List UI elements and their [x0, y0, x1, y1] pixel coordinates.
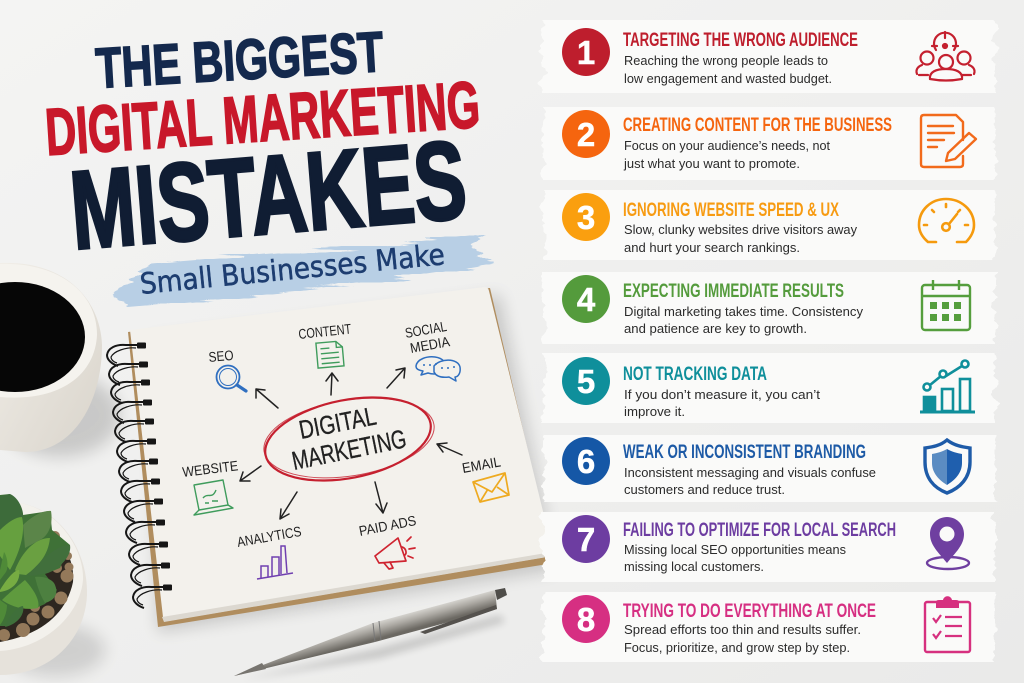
icon: growth chart	[920, 360, 975, 412]
row 1	[543, 20, 995, 93]
description	[623, 138, 830, 171]
node: Social Media	[404, 318, 460, 381]
notebook shadow	[150, 295, 556, 632]
heading: IGNORING WEBSITE SPEED & UX	[623, 200, 839, 221]
description: Missing local SEO opportunities means	[624, 542, 846, 557]
row 8	[543, 592, 995, 662]
description: improve it.	[624, 404, 685, 419]
Email label: EMAIL	[461, 453, 502, 476]
mistakes list	[543, 20, 995, 662]
band	[543, 512, 995, 582]
node: SEO	[208, 347, 246, 391]
subtitle text: Small Businesses Make	[138, 237, 446, 301]
number badge	[562, 275, 610, 323]
cup rim	[0, 264, 97, 398]
band	[543, 353, 995, 423]
pen clip	[420, 605, 497, 634]
pen band	[373, 621, 381, 642]
cup body	[0, 263, 102, 452]
Website label: WEBSITE	[181, 457, 239, 480]
number badge	[562, 28, 610, 76]
description	[624, 542, 846, 574]
band	[543, 107, 995, 180]
number badge	[562, 515, 610, 563]
number badge: 3	[577, 199, 595, 236]
description: Spread efforts too thin and results suffer.	[624, 622, 861, 637]
band	[543, 190, 995, 260]
succulent leaves	[0, 494, 70, 627]
description: Inconsistent messaging and visuals confuse	[624, 465, 876, 480]
icon: envelope	[473, 473, 509, 502]
icon: checklist clipboard	[925, 596, 970, 652]
icon: map pin	[927, 517, 969, 569]
description: and hurt your search rankings.	[624, 240, 800, 255]
spiral binding	[107, 342, 172, 608]
node: Paid Ads	[358, 512, 418, 569]
page edge	[162, 552, 553, 622]
description	[624, 53, 832, 86]
description	[624, 622, 861, 655]
pen button	[495, 588, 507, 600]
description: missing local customers.	[624, 559, 764, 574]
icon: shield	[925, 440, 970, 493]
heading: TRYING TO DO EVERYTHING AT ONCE	[623, 601, 876, 622]
icon: laptop	[194, 480, 233, 515]
number badge: 5	[577, 363, 595, 400]
pen tip	[234, 663, 266, 676]
oval	[258, 385, 440, 493]
row 4	[543, 272, 995, 344]
description: If you don’t measure it, you can’t	[624, 387, 820, 402]
band	[543, 592, 995, 662]
plant	[0, 494, 105, 676]
title line: The Biggest: THE BIGGEST	[94, 20, 385, 101]
number badge: 2	[577, 116, 595, 153]
node: Content	[298, 320, 352, 368]
Paid Ads label: PAID ADS	[358, 512, 418, 539]
description: Digital marketing takes time. Consistency	[624, 304, 864, 319]
icon: chat bubbles	[416, 357, 460, 381]
description: Focus, prioritize, and grow step by step.	[624, 640, 850, 655]
number badge	[562, 357, 610, 405]
description: and patience are key to growth.	[624, 321, 807, 336]
description: just what you want to promote.	[623, 156, 800, 171]
heading: WEAK OR INCONSISTENT BRANDING	[623, 442, 866, 463]
icon: magnifier	[216, 366, 246, 391]
icon: document and pencil	[921, 115, 976, 167]
number badge	[562, 193, 610, 241]
title line: Mistakes: MISTAKES	[66, 118, 471, 273]
number badge	[562, 595, 610, 643]
title	[43, 20, 482, 273]
row 5	[543, 353, 995, 423]
pot rim	[0, 503, 83, 651]
number badge: 7	[577, 521, 595, 558]
icon: target audience	[916, 32, 975, 80]
heading: TARGETING THE WRONG AUDIENCE	[623, 30, 858, 51]
description	[624, 304, 864, 336]
pen shadow	[240, 615, 505, 680]
description: Reaching the wrong people leads to	[624, 53, 828, 68]
soil	[0, 525, 73, 642]
band	[543, 20, 995, 93]
description	[624, 222, 857, 255]
icon: megaphone	[375, 537, 415, 569]
coffee cup	[0, 263, 120, 457]
pen	[234, 588, 507, 680]
icon: calendar	[922, 280, 970, 330]
title line: Digital Marketing: DIGITAL MARKETING	[43, 67, 482, 169]
row 7	[543, 512, 995, 582]
icon: speedometer	[919, 199, 974, 242]
Analytics label: ANALYTICS	[236, 523, 303, 550]
row 6	[543, 435, 995, 502]
icon: bar chart	[257, 546, 293, 579]
description: Focus on your audience’s needs, not	[624, 138, 830, 153]
coffee	[0, 282, 85, 392]
number badge: 8	[577, 601, 595, 638]
pen body	[234, 590, 497, 676]
notebook cover	[128, 288, 554, 627]
description: Slow, clunky websites drive visitors away	[624, 222, 857, 237]
description: low engagement and wasted budget.	[624, 71, 832, 86]
central oval: Digital Marketing	[258, 385, 440, 493]
icon: document	[316, 341, 344, 368]
row 3	[543, 190, 995, 260]
band	[543, 435, 995, 502]
arrows	[240, 368, 462, 519]
description: customers and reduce trust.	[624, 482, 785, 497]
heading: NOT TRACKING DATA	[623, 364, 767, 385]
cup shadow	[0, 373, 120, 457]
heading: FAILING TO OPTIMIZE FOR LOCAL SEARCH	[623, 520, 896, 541]
number badge: 4	[577, 281, 596, 318]
number badge: 1	[577, 34, 595, 71]
node: Email	[461, 453, 509, 502]
number badge	[562, 437, 610, 485]
label: Marketing: MARKETING	[289, 423, 409, 476]
heading: CREATING CONTENT FOR THE BUSINESS	[623, 115, 892, 136]
pot	[0, 503, 87, 675]
subtitle with brush stroke	[112, 233, 494, 306]
Social label: SOCIAL	[404, 318, 448, 341]
notebook page	[130, 287, 552, 621]
pebbles	[0, 531, 74, 641]
brush stroke	[112, 233, 494, 306]
row 2	[543, 107, 995, 180]
SEO label: SEO	[208, 347, 234, 365]
number badge: 6	[577, 443, 595, 480]
Media label: MEDIA	[409, 333, 451, 356]
label: Digital: DIGITAL	[296, 401, 379, 445]
description	[624, 387, 820, 419]
number badge	[562, 110, 610, 158]
notebook	[107, 287, 556, 632]
heading: EXPECTING IMMEDIATE RESULTS	[623, 281, 844, 302]
description	[624, 465, 876, 497]
band	[543, 272, 995, 344]
node: Website	[181, 457, 239, 515]
pot shadow	[5, 624, 105, 676]
Content label: CONTENT	[298, 320, 352, 342]
node: Analytics	[236, 523, 303, 579]
